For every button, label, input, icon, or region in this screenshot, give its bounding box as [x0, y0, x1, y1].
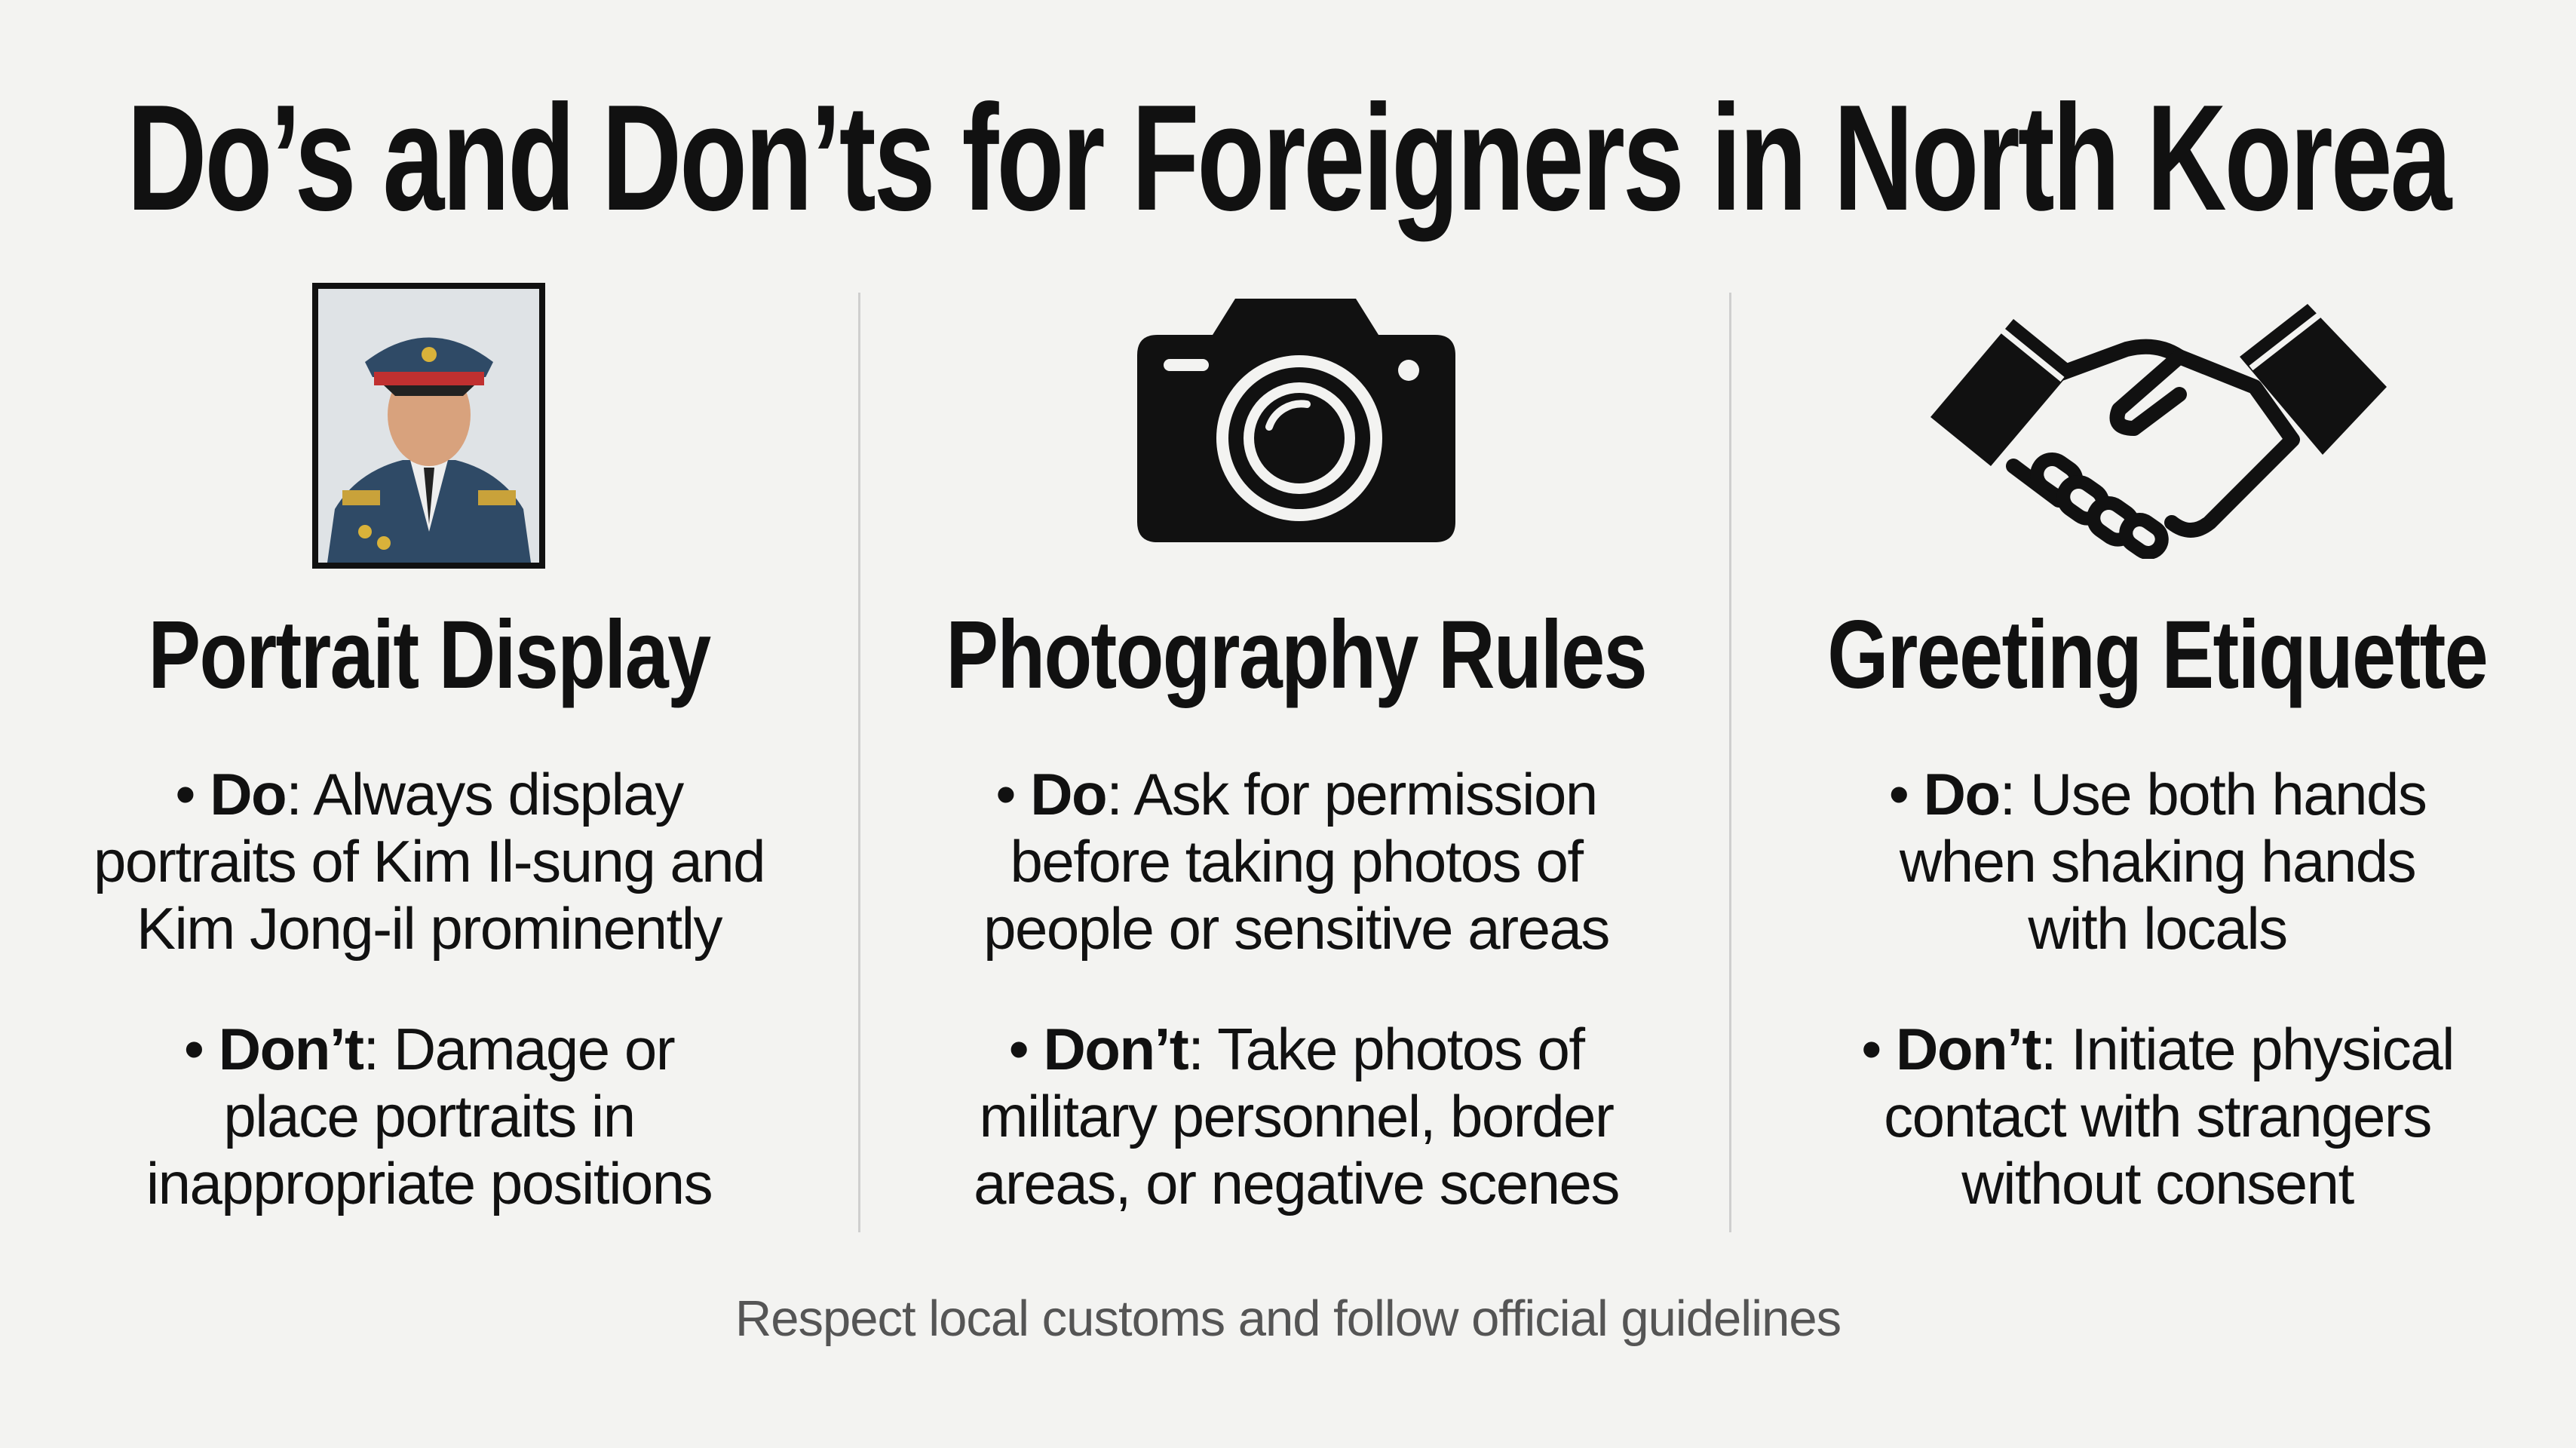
text: dont: • Don’t: Damage or	[184, 1016, 674, 1082]
text: do: when shaking hands	[1900, 828, 2415, 894]
text: dont	[146, 1016, 712, 1216]
text: do: before taking photos of	[1010, 828, 1583, 894]
text: do: • Do: Ask for permission	[995, 761, 1597, 827]
text: dont: • Don’t: Take photos of	[1008, 1016, 1584, 1082]
text: dont	[974, 1016, 1619, 1216]
footer note: Respect local customs and follow official guidelines	[735, 1290, 1841, 1347]
text: do	[1889, 761, 2426, 962]
text: dont: inappropriate positions	[146, 1150, 712, 1216]
title: Do’s and Don’ts for Foreigners in North Korea	[127, 74, 2449, 242]
text: do: • Do: Always display	[175, 761, 683, 827]
text: dont: without consent	[1961, 1150, 2354, 1216]
panel: greeting etiquette	[1828, 304, 2487, 1216]
text: do: Kim Jong-il prominently	[136, 895, 722, 962]
heading: photography rules: Photography Rules	[946, 601, 1646, 709]
heading: portrait display: Portrait Display	[149, 601, 710, 709]
text: do: portraits of Kim Il-sung and	[94, 828, 765, 894]
icon: handshake	[1930, 304, 2387, 559]
text: dont: areas, or negative scenes	[974, 1150, 1619, 1216]
text: dont	[1861, 1016, 2454, 1216]
text: do	[983, 761, 1609, 962]
text: do: • Do: Use both hands	[1889, 761, 2426, 827]
text: dont: contact with strangers	[1884, 1083, 2431, 1149]
panel: portrait display	[94, 283, 765, 1216]
text: do	[94, 761, 765, 962]
panel: photography rules	[946, 299, 1646, 1216]
text: dont: place portraits in	[223, 1083, 635, 1149]
text: do: with locals	[2028, 895, 2287, 962]
icon: framed portrait	[312, 283, 545, 569]
text: dont: military personnel, border	[979, 1083, 1614, 1149]
text: dont: • Don’t: Initiate physical	[1861, 1016, 2454, 1082]
icon: camera	[1137, 299, 1455, 542]
heading: greeting etiquette: Greeting Etiquette	[1828, 601, 2487, 709]
text: do: people or sensitive areas	[983, 895, 1609, 962]
